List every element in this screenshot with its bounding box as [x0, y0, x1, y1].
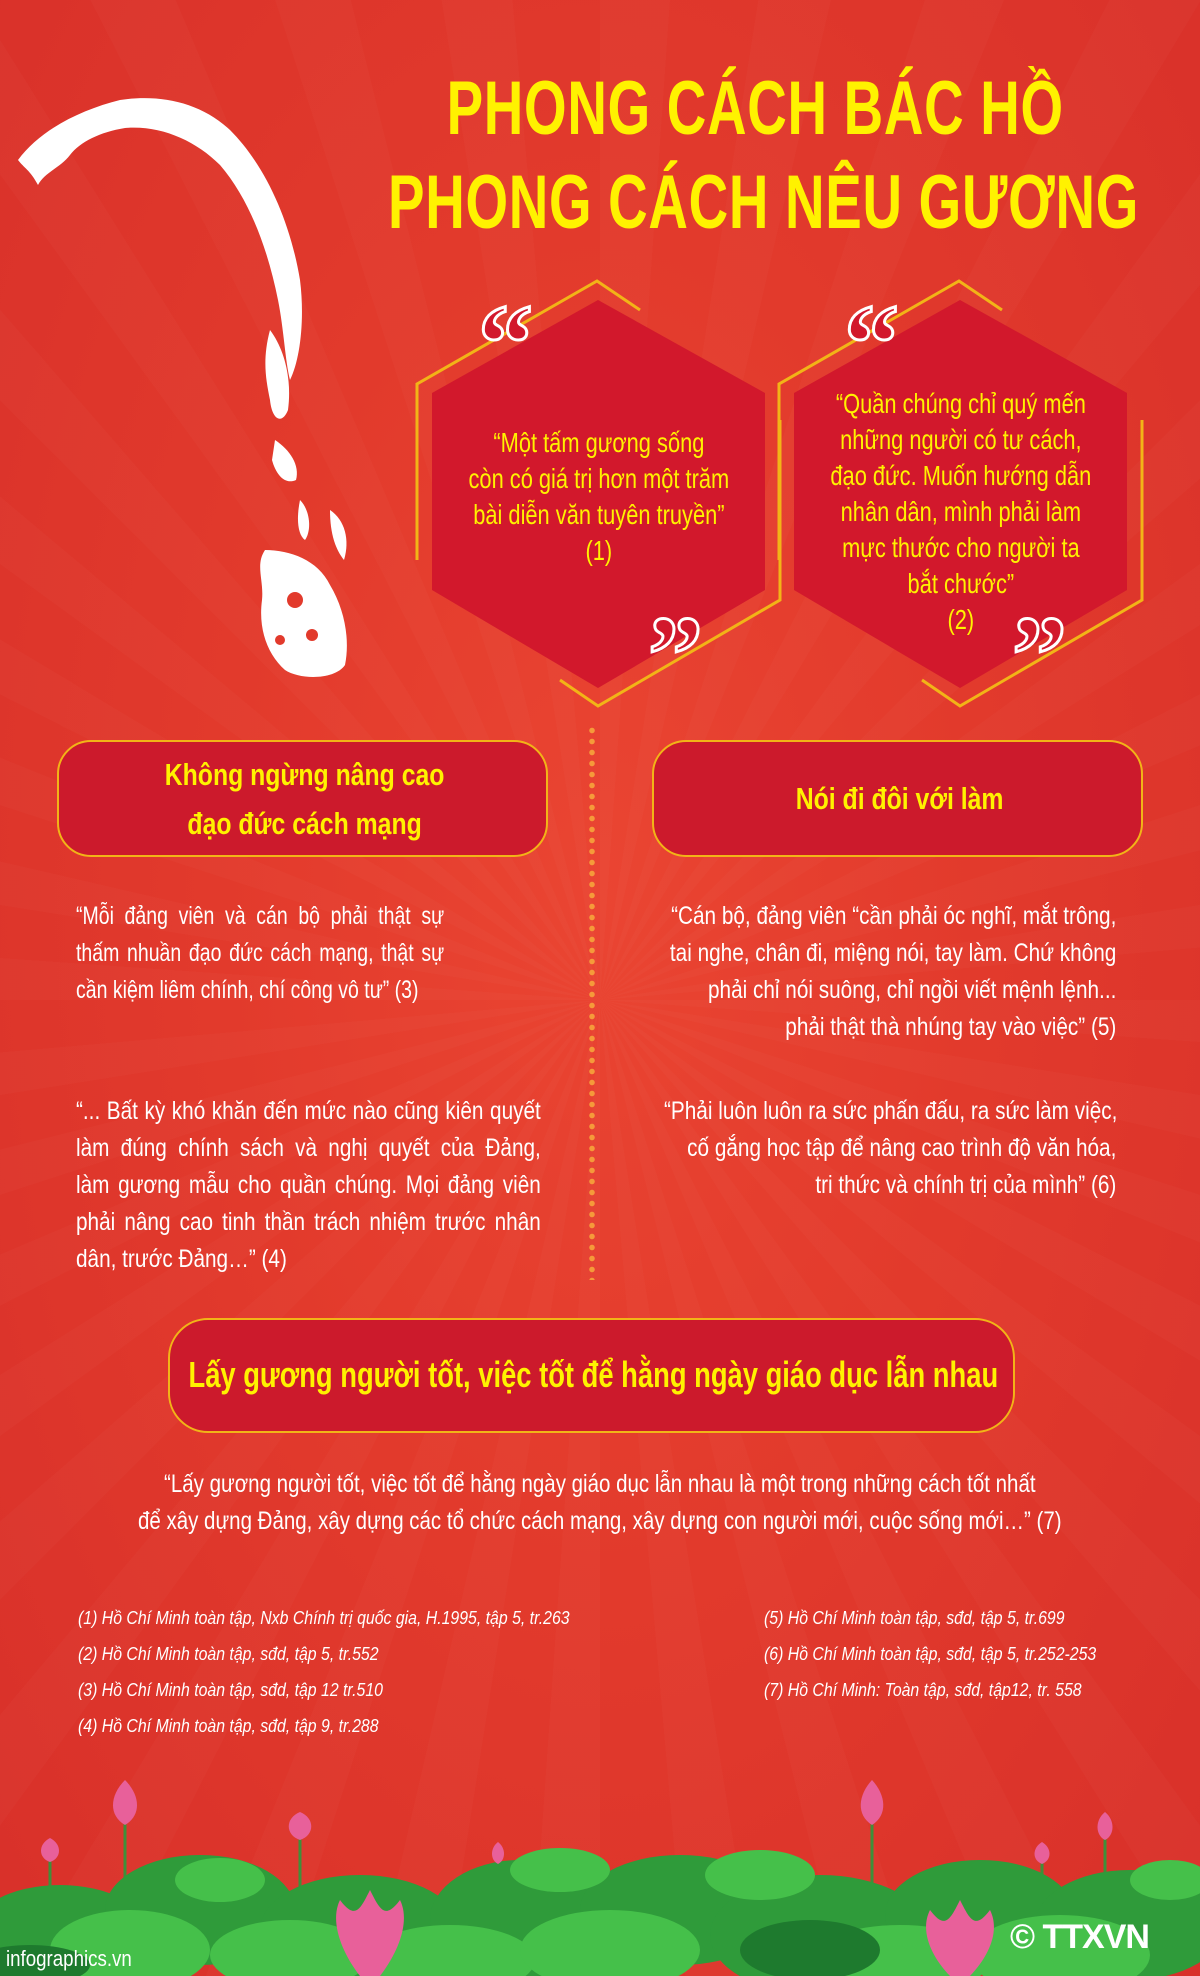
right text block 2: “Phải luôn luôn ra sức phấn đấu, ra sức làm việc, [664, 1097, 1117, 1125]
right text block 1: “Cán bộ, đảng viên “cần phải óc nghĩ, mắt trông, [671, 902, 1116, 930]
lotus footer [0, 1780, 1200, 1976]
quote text 1: còn có giá trị hơn một trăm [469, 463, 729, 494]
references left: (4) Hồ Chí Minh toàn tập, sđd, tập 9, tr.288 [78, 1716, 379, 1736]
right text block 2 [664, 1097, 1117, 1199]
left text block 2: dân, trước Đảng…” (4) [76, 1245, 287, 1273]
references right [764, 1608, 1096, 1700]
quote text 1 [469, 427, 729, 566]
left text block 2: “... Bất kỳ khó khăn đến mức nào cũng kiên quyết [76, 1097, 541, 1125]
right text block 2: tri thức và chính trị của mình” (6) [815, 1171, 1116, 1199]
right text block 1: phải chỉ nói suông, chỉ ngồi viết mệnh lệnh... [708, 976, 1116, 1004]
title: PHONG CÁCH BÁC HỒ [447, 66, 1064, 151]
left text block 1 [76, 902, 444, 1004]
left text block 1: “Mỗi đảng viên và cán bộ phải thật sự [76, 902, 444, 930]
header pill: Không ngừng nâng cao đạo đức cách mạng [57, 740, 548, 857]
quote hexagon 1 [416, 279, 782, 716]
quote text 2: mực thước cho người ta [842, 532, 1080, 563]
quote text 2: đạo đức. Muốn hướng dẫn [830, 460, 1091, 491]
header pill: Nói đi đôi với làm [652, 740, 1143, 857]
references left: (3) Hồ Chí Minh toàn tập, sđd, tập 12 tr.510 [78, 1680, 383, 1700]
right text block 1: phải thật thà nhúng tay vào việc” (5) [785, 1013, 1116, 1041]
references left: (2) Hồ Chí Minh toàn tập, sđd, tập 5, tr.552 [78, 1644, 379, 1664]
references left: (1) Hồ Chí Minh toàn tập, Nxb Chính trị quốc gia, H.1995, tập 5, tr.263 [78, 1608, 570, 1628]
left text block 2: phải nâng cao tinh thần trách nhiệm trước nhân [76, 1208, 541, 1236]
left text block 1: cần kiệm liêm chính, chí công vô tư” (3) [76, 976, 419, 1004]
quote 7: “Lấy gương người tốt, việc tốt để hằng ngày giáo dục lẫn nhau là một trong những cách tốt nhất [164, 1470, 1036, 1498]
quote hexagon 2 [778, 279, 1144, 716]
references left [78, 1608, 570, 1736]
quote text 2: (2) [948, 604, 974, 635]
quote 7 [138, 1470, 1062, 1535]
quote text 2: bắt chước” [908, 568, 1014, 599]
left text block 2: làm đúng chính sách và nghị quyết của Đảng, [76, 1134, 541, 1162]
header pill: Không ngừng nâng cao đạo đức cách mạng: Không ngừng nâng cao [165, 757, 444, 792]
portrait silhouette of Ho Chi Minh [18, 98, 347, 677]
title [388, 66, 1139, 245]
logo TTXVN: © TTXVN [1010, 1918, 1149, 1956]
footer site name: infographics.vn [6, 1946, 132, 1971]
header pill: Lấy gương người tốt: Lấy gương người tốt, việc tốt để hằng ngày giáo dục lẫn nhau [188, 1354, 998, 1395]
header pill: Nói đi đôi với làm: Nói đi đôi với làm [796, 781, 1003, 816]
references right: (6) Hồ Chí Minh toàn tập, sđd, tập 5, tr.252-253 [764, 1644, 1096, 1664]
quote mark close: ” [1012, 594, 1067, 716]
references right: (7) Hồ Chí Minh: Toàn tập, sđd, tập12, tr. 558 [764, 1680, 1082, 1700]
quote text 2: nhân dân, mình phải làm [841, 496, 1081, 527]
quote text 2 [830, 388, 1091, 635]
left text block 2 [76, 1097, 541, 1273]
header pill: Lấy gương người tốt [168, 1318, 1015, 1433]
quote text 2: những người có tư cách, [840, 424, 1082, 455]
dotted divider [589, 725, 595, 1280]
left text block 2: làm gương mẫu cho quần chúng. Mọi đảng viên [76, 1171, 541, 1199]
quote text 1: “Một tấm gương sống [493, 427, 704, 458]
quote 7: để xây dựng Đảng, xây dựng các tổ chức cách mạng, xây dựng con người mới, cuộc sống mới…” (7) [138, 1507, 1062, 1535]
right text block 1: tai nghe, chân đi, miệng nói, tay làm. Chứ không [670, 939, 1116, 967]
quote text 1: (1) [586, 535, 612, 566]
references right: (5) Hồ Chí Minh toàn tập, sđd, tập 5, tr.699 [764, 1608, 1065, 1628]
title: PHONG CÁCH NÊU GƯƠNG [388, 160, 1139, 245]
right text block 1 [670, 902, 1116, 1041]
right text block 2: cố gắng học tập để nâng cao trình độ văn hóa, [687, 1134, 1116, 1162]
quote text 1: bài diễn văn tuyên truyền” [473, 499, 725, 530]
quote mark open: “ [844, 282, 899, 404]
quote mark open: “ [478, 282, 533, 404]
header pill: Không ngừng nâng cao đạo đức cách mạng: đạo đức cách mạng [187, 806, 422, 841]
quote mark close: ” [648, 594, 703, 716]
quote text 2: “Quần chúng chỉ quý mến [836, 388, 1086, 419]
left text block 1: thấm nhuần đạo đức cách mạng, thật sự [76, 939, 444, 967]
